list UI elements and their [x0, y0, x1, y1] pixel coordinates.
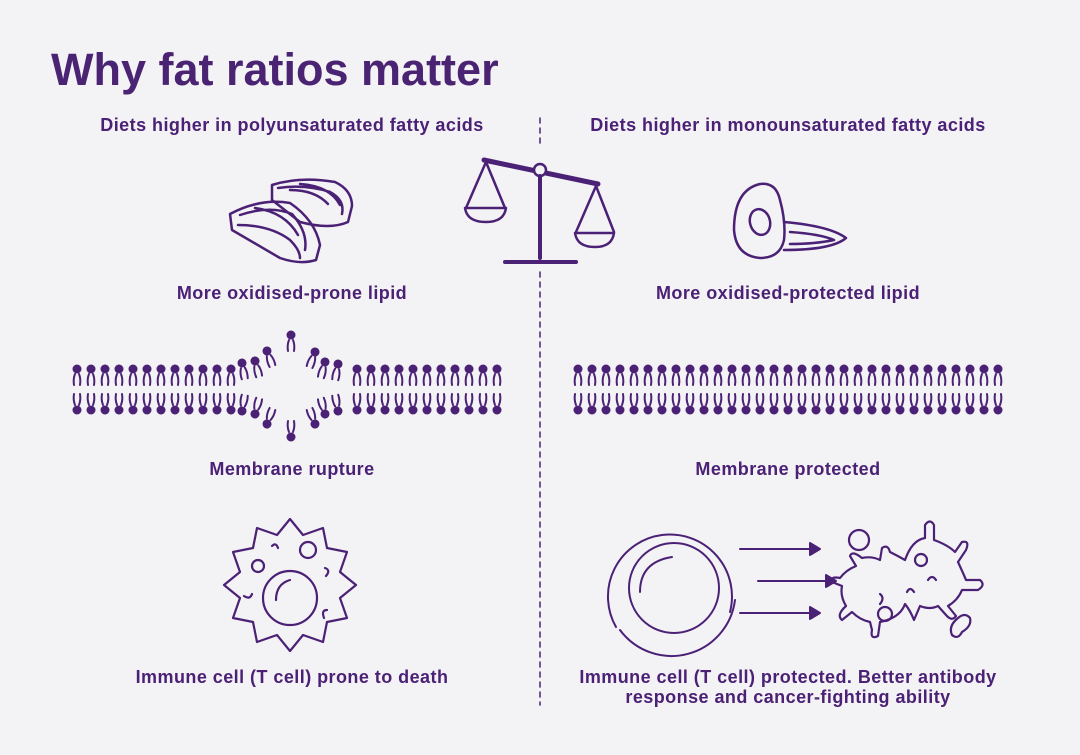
label: oxidised-prone: More oxidised-prone lipid [177, 283, 407, 303]
icon: cancer cells [832, 522, 983, 637]
label: T cell death: Immune cell (T cell) prone to death [136, 667, 448, 687]
label: T cell protected: Immune cell (T cell) protected. Better antibody [579, 667, 997, 687]
arrows [740, 543, 836, 619]
label: membrane protected: Membrane protected [695, 459, 881, 479]
membrane: right protected [571, 355, 1005, 425]
divider [539, 118, 541, 705]
icon: fish steaks [230, 180, 352, 262]
title: Why fat ratios matter [51, 44, 499, 95]
label: oxidised-protected: More oxidised-protected lipid [656, 283, 920, 303]
label: membrane rupture: Membrane rupture [209, 459, 375, 479]
icon: avocado [734, 184, 846, 258]
icon: protected T cell [608, 534, 735, 656]
label: T cell protected: response and cancer-fighting ability [625, 687, 951, 707]
heading: polyunsaturated: Diets higher in polyunsaturated fatty acids [100, 115, 484, 135]
icon: spiky T cell [224, 519, 356, 651]
label: T cell protected [579, 667, 997, 707]
membrane: left ruptured [70, 330, 504, 442]
icon: scale [465, 160, 614, 262]
heading: monounsaturated: Diets higher in monounsaturated fatty acids [590, 115, 986, 135]
